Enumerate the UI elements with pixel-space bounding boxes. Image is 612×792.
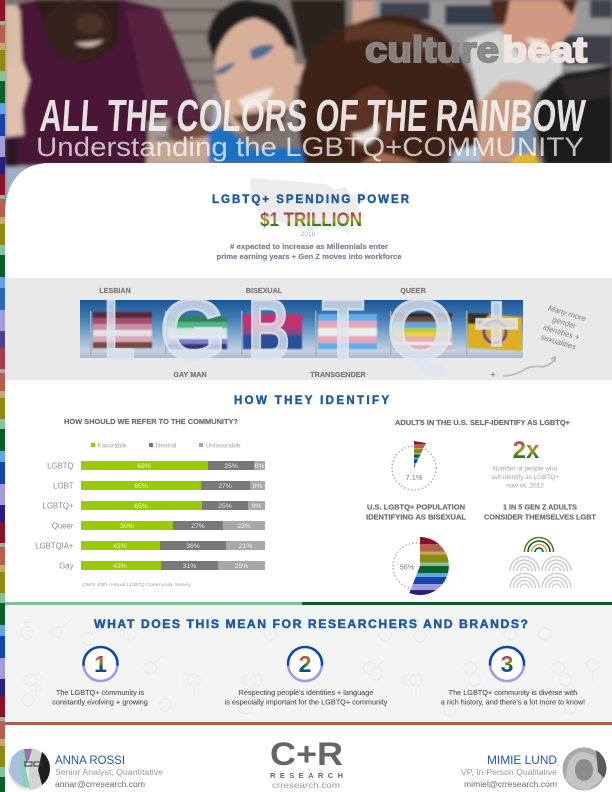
bar values: 21% <box>239 543 252 550</box>
rainbow band below researchers panel <box>5 722 612 725</box>
bar values: 6% <box>255 463 264 470</box>
flag tile: lesbian <box>80 300 155 358</box>
email: annar@crresearch.com <box>55 780 145 789</box>
number badge three <box>490 647 524 681</box>
panel: what does this mean <box>5 605 612 722</box>
bar values: 25% <box>218 503 232 510</box>
bar values: 25% <box>224 463 238 470</box>
note: # expected to increase as Millennials enter <box>230 242 388 251</box>
legend: Favorable <box>98 442 127 450</box>
flag labels: BISEXUAL <box>246 286 283 295</box>
callout: many more identities: Many more <box>547 303 588 323</box>
bar values: 65% <box>134 503 148 510</box>
flag labels: LESBIAN <box>99 286 131 295</box>
brand logo: culturebeat: beat <box>502 29 587 70</box>
flag tile: bisexual <box>231 300 305 358</box>
bar values: 43% <box>113 543 127 550</box>
number badge one: 1 <box>94 651 107 677</box>
bar values: 65% <box>134 483 148 490</box>
flag tile: gay man <box>155 300 231 358</box>
bar values: 69% <box>137 463 151 470</box>
stat heading line two: CONSIDER THEMSELVES LGBT <box>484 514 597 522</box>
logo mark: C+R <box>270 736 343 772</box>
figure: 2x: 2x <box>513 437 540 464</box>
callout: many more identities: identities + <box>542 323 581 342</box>
year: 2018 <box>301 231 316 238</box>
subtitle: Understanding the LGBTQ+COMMUNITY <box>36 132 584 162</box>
takeaway text two <box>225 688 388 706</box>
stat heading: 1 IN 5 GEN Z ADULTS <box>503 504 577 512</box>
takeaway text three: The LGBTQ+ community is diverse with <box>449 688 577 697</box>
takeaway text one: The LGBTQ+ community is <box>56 688 144 697</box>
big letters: LGBTQ+: G <box>160 283 226 378</box>
author: Mimie Lund <box>461 748 606 790</box>
rainbow pie <box>409 537 449 595</box>
row labels: Gay <box>59 562 74 570</box>
website: crresearch.com <box>272 780 340 790</box>
callout: many more identities: gender <box>551 315 578 331</box>
stat heading: ADULTS IN THE U.S. SELF-IDENTIFY AS LGBTQ+ <box>395 419 570 427</box>
flag labels: + <box>491 370 495 379</box>
brand logo: culturebeat <box>365 29 587 70</box>
figure: one trillion dollars: $1 TRILLION <box>260 210 362 231</box>
big letters: LGBTQ+: + <box>473 276 520 371</box>
arrow to callout <box>503 357 555 376</box>
background gender symbols <box>21 618 599 716</box>
colored rainbow icon <box>524 538 554 552</box>
big letters: LGBTQ+: L <box>104 283 135 378</box>
big letters: LGBTQ+: B <box>248 283 290 378</box>
description: Number of people who <box>493 466 558 472</box>
bar values: 8% <box>253 483 262 490</box>
bar values: 31% <box>183 563 196 570</box>
big letters: LGBTQ+: Q <box>387 283 454 378</box>
panel: LGBTQ+ flags band <box>5 278 612 380</box>
map of the United States <box>250 178 368 235</box>
stat: adults self-identify <box>392 419 570 490</box>
row labels: LGBTQ+ <box>43 502 74 510</box>
bar values: 43% <box>113 563 127 570</box>
bar values: 27% <box>218 483 232 490</box>
heading: how they identify: HOW THEY IDENTIFY <box>234 395 389 407</box>
bar values: 27% <box>191 523 205 530</box>
row labels: LGBTQ <box>47 462 74 470</box>
number badge two: 2 <box>299 651 311 677</box>
bar chart: how should we refer to the community <box>35 418 265 588</box>
flag tile: transgender <box>305 300 380 358</box>
stat: twice as many <box>491 437 559 490</box>
takeaway one <box>52 647 148 706</box>
flag labels: TRANSGENDER <box>310 370 367 379</box>
description: self-identify as LGBTQ+ <box>491 474 559 481</box>
dotted circle <box>392 446 436 490</box>
bar values: 36% <box>186 543 200 550</box>
bar values: 50% <box>120 523 134 530</box>
big letters: LGBTQ+: T <box>322 283 364 378</box>
role: Senior Analyst, Quantitative <box>55 768 164 777</box>
takeaway text one: constantly evolving + growing <box>52 698 148 706</box>
legend: Unfavorable <box>206 442 241 450</box>
source: CMI's 15th Annual LGBTQ Community Survey <box>82 582 192 588</box>
takeaway text two: is especially important for the LGBTQ+ community <box>225 698 388 706</box>
flag tile: plus <box>456 300 523 358</box>
heading: WHAT DOES THIS MEAN FOR RESEARCHERS AND BRANDS? <box>94 617 528 631</box>
row labels: Queer <box>52 522 74 530</box>
gray rainbow icons <box>510 556 571 588</box>
flag labels: GAY MAN <box>173 370 207 379</box>
stat heading line two: IDENTIFYING AS BISEXUAL <box>366 514 467 522</box>
portrait <box>8 748 50 790</box>
description: now vs. 2012 <box>506 482 544 490</box>
row labels: LGBTQIA+ <box>35 542 74 550</box>
flag labels: QUEER <box>400 286 427 295</box>
bar values: 9% <box>252 503 261 510</box>
callout: many more identities <box>538 303 588 352</box>
panel: spending power <box>212 178 410 261</box>
flag labels <box>99 286 495 379</box>
rainbow band above researchers panel <box>5 602 612 605</box>
takeaway text one <box>52 688 148 706</box>
left rainbow strip <box>0 0 5 792</box>
logo word: RESEARCH <box>270 771 343 780</box>
brand logo: culturebeat: culture <box>365 29 499 70</box>
name: ANNA ROSSI <box>55 753 125 767</box>
row labels: LGBT <box>53 482 74 490</box>
heading: spending power: LGBTQ+ SPENDING POWER <box>212 194 410 206</box>
number badge two <box>288 647 322 681</box>
dotted circle <box>393 543 439 589</box>
stat: Gen Z rainbows <box>484 504 597 588</box>
row labels <box>35 462 74 570</box>
legend <box>91 442 241 450</box>
stat: bisexual population <box>366 504 467 595</box>
bars <box>81 461 265 570</box>
name: MIMIE LUND <box>487 753 557 767</box>
value: 7.1% <box>406 473 423 482</box>
role: VP, In-Person Qualitative <box>461 768 558 777</box>
rainbow wedge <box>414 441 426 468</box>
number badge three: 3 <box>501 651 513 677</box>
callout: many more identities: sexualities <box>540 332 577 352</box>
email: mimiel@crresearch.com <box>464 780 557 789</box>
author: Anna Rossi <box>8 748 164 790</box>
value: 56% <box>400 562 415 572</box>
chart title: HOW SHOULD WE REFER TO THE COMMUNITY? <box>64 418 238 426</box>
note line two: prime earning years + Gen Z moves into workforce <box>216 252 402 261</box>
takeaway text two: Respecting people's identities + language <box>239 688 373 697</box>
hero photo <box>0 0 612 217</box>
takeaway text three <box>441 688 585 706</box>
takeaway three <box>441 647 585 706</box>
takeaway two <box>225 647 388 706</box>
bar values: 25% <box>235 563 248 570</box>
description <box>491 466 559 490</box>
logo: C+R Research <box>270 736 343 790</box>
big letters: LGBTQ+ <box>104 276 520 378</box>
flag tile: queer <box>380 300 456 358</box>
bar values: 23% <box>237 523 251 530</box>
legend: Neutral <box>156 442 177 450</box>
takeaway text three: a rich history, and there's a lot more to know! <box>441 698 585 706</box>
stat heading: U.S. LGBTQ+ POPULATION <box>367 504 465 512</box>
portrait <box>562 748 606 790</box>
bar values <box>113 463 264 570</box>
white rounded content area <box>5 163 612 216</box>
